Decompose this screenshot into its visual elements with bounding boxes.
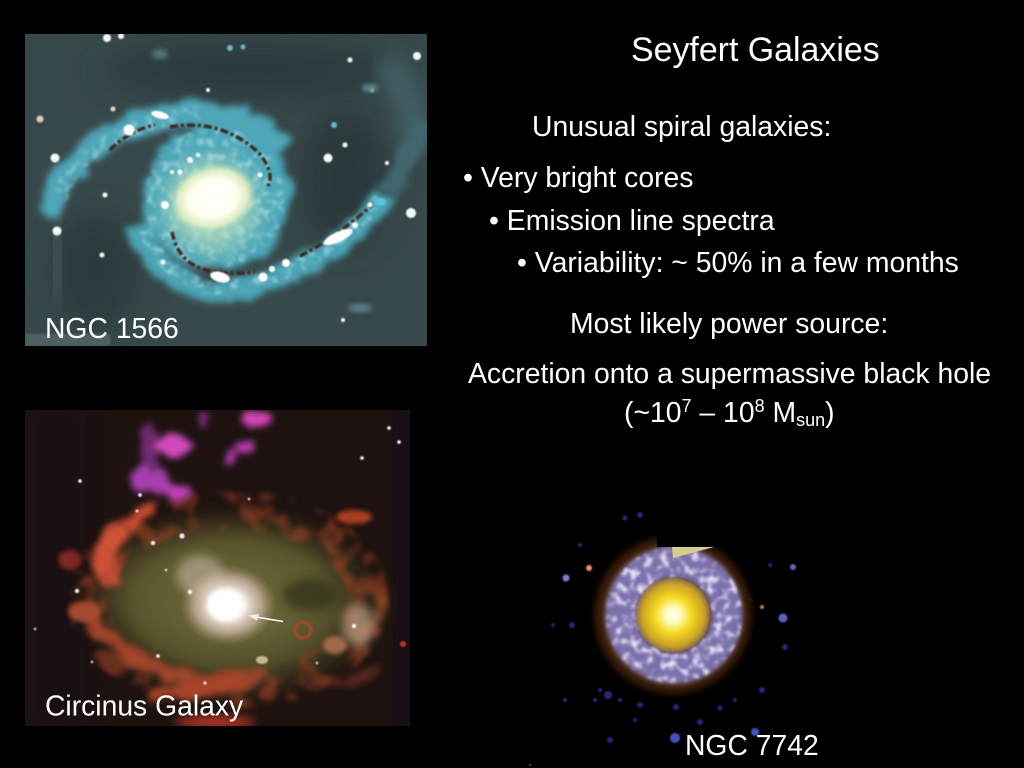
- dust lanes: [110, 125, 372, 273]
- stars: [50, 33, 421, 322]
- small speck: [529, 764, 531, 766]
- label: Circinus Galaxy: Circinus Galaxy: [45, 690, 244, 722]
- outer blue stars: [551, 512, 796, 743]
- dark patches: [282, 579, 338, 611]
- text: black hole mass range: 8: [755, 396, 765, 416]
- arrow: points to Circinus nucleus: [248, 614, 283, 622]
- white nebula and core: [176, 555, 224, 595]
- yellow core: [636, 578, 710, 652]
- bright knots: [124, 109, 372, 284]
- heading: power source: Most likely power source:: [570, 308, 888, 340]
- lavender star-forming ring: [621, 562, 727, 668]
- cropped top: [657, 533, 718, 547]
- heading: unusual spiral galaxies: Unusual spiral galaxies:: [532, 111, 831, 143]
- bullet: very bright cores: • Very bright cores: [463, 162, 693, 194]
- bullet: variability: • Variability: ~ 50% in a few months: [517, 247, 959, 279]
- text: black hole mass range: – 10: [692, 397, 755, 429]
- mottled star clusters: [60, 114, 380, 287]
- core: [171, 164, 256, 231]
- red arcs: [85, 510, 381, 692]
- label: NGC 7742: NGC 7742: [685, 729, 819, 761]
- text: black hole mass range: M: [765, 397, 796, 429]
- text: black hole mass range: sun: [796, 410, 825, 430]
- image: Circinus Galaxy: [25, 410, 410, 728]
- label: NGC 1566: NGC 1566: [45, 312, 179, 344]
- text: black hole mass range: (~10: [624, 397, 682, 429]
- text: black hole mass range: 7: [682, 396, 692, 416]
- magenta clouds: [123, 411, 270, 501]
- image: NGC 7742 ring galaxy: [550, 511, 797, 744]
- title: Seyfert Galaxies: [631, 31, 880, 69]
- bullet: emission line spectra: • Emission line spectra: [489, 205, 775, 237]
- image: NGC 1566 spiral galaxy: [25, 33, 427, 346]
- text: accretion: Accretion onto a supermassive black hole: [468, 358, 991, 390]
- text: black hole mass range: ): [825, 397, 835, 429]
- red mottling: [88, 510, 368, 690]
- stars: [34, 426, 401, 684]
